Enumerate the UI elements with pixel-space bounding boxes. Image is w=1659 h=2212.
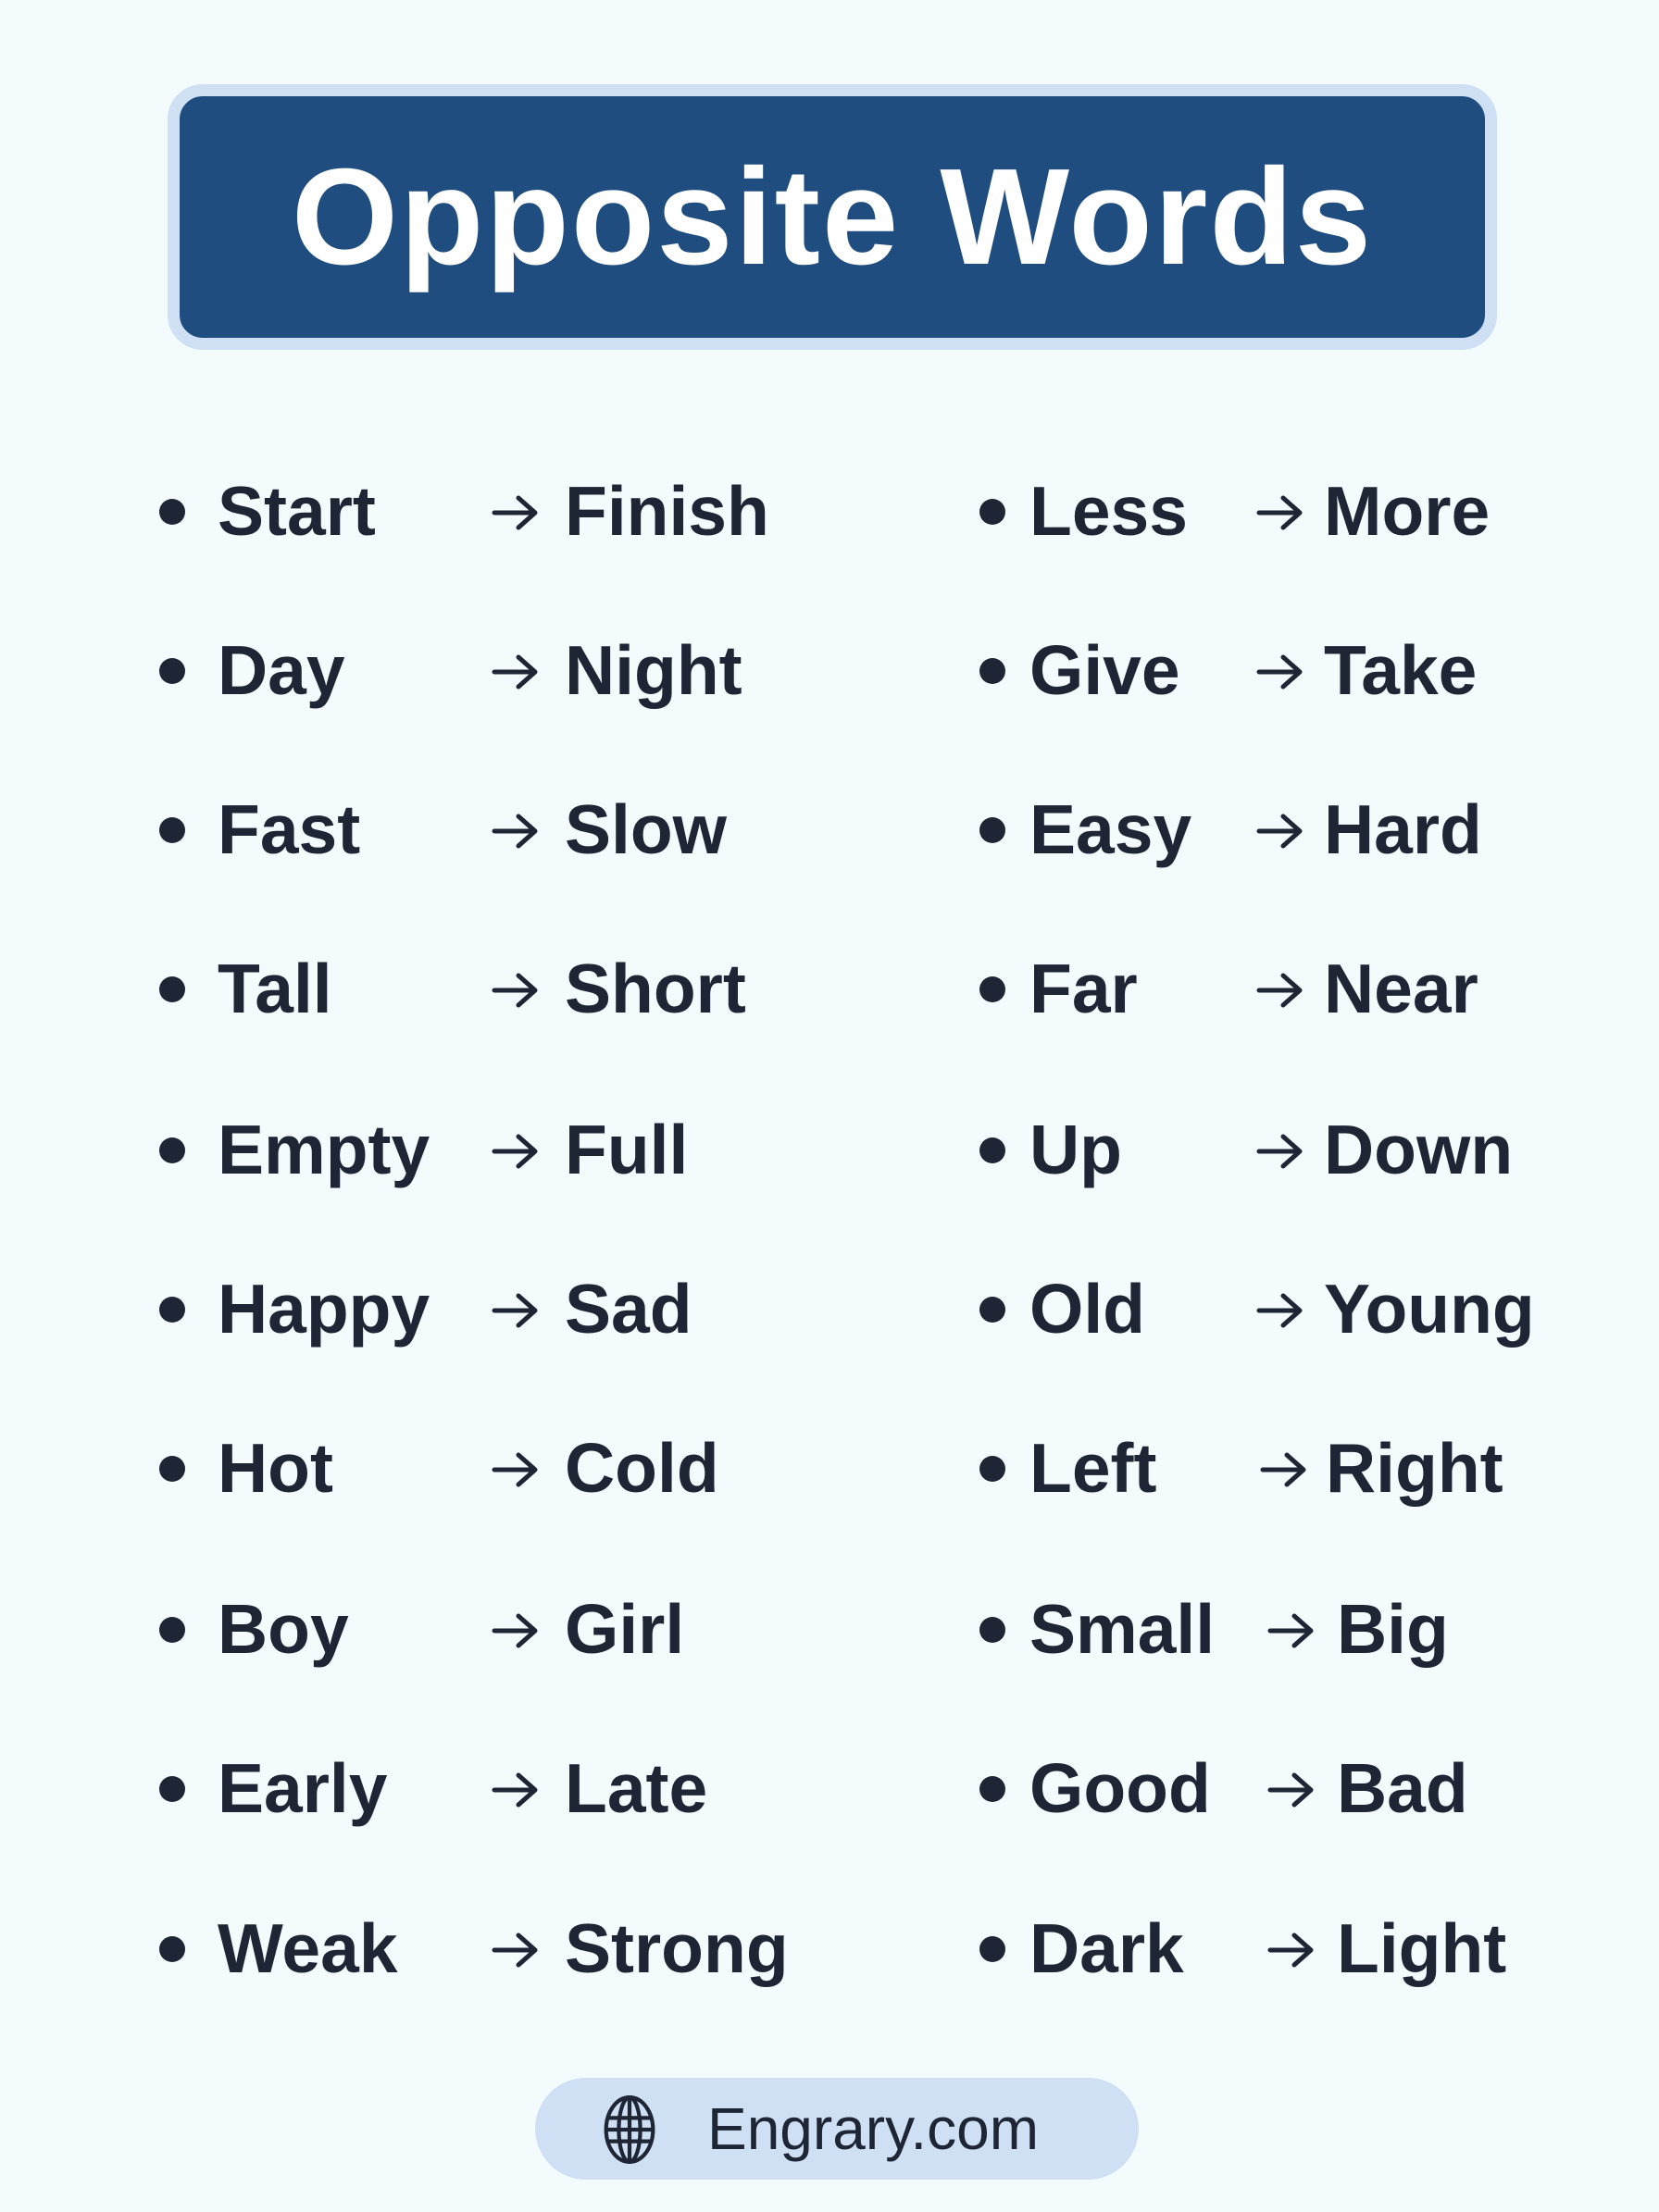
row 6: Old [1029, 1270, 1145, 1348]
row 9: Late [565, 1749, 707, 1827]
row 6: Sad [565, 1270, 692, 1348]
title: Opposite Words [292, 141, 1373, 292]
row 4: Far [1029, 950, 1138, 1027]
row 2 [159, 631, 1477, 709]
row 10: Dark [1029, 1909, 1184, 1987]
row 8: Boy [218, 1590, 349, 1668]
row 10: Light [1337, 1909, 1506, 1987]
row 10: Weak [218, 1909, 398, 1987]
row 9 [159, 1749, 1468, 1827]
row 5: Full [565, 1111, 688, 1188]
row 1: More [1324, 472, 1490, 550]
row 5: Up [1029, 1111, 1122, 1188]
row 6: Happy [218, 1270, 430, 1348]
row 8: Big [1337, 1590, 1449, 1668]
row 4: Tall [218, 950, 332, 1027]
row 7: Right [1326, 1429, 1503, 1507]
row 1 [159, 472, 1490, 550]
row 7: Hot [218, 1429, 333, 1507]
row 10: Strong [565, 1909, 789, 1987]
row 3: Easy [1029, 790, 1191, 868]
footer [535, 2078, 1139, 2180]
row 3: Slow [565, 790, 727, 868]
row 5 [159, 1111, 1513, 1188]
website text: Engrary.com [707, 2095, 1039, 2162]
row 1: Start [218, 472, 376, 550]
row 3 [159, 790, 1482, 868]
row 7 [159, 1429, 1503, 1507]
title [168, 84, 1497, 350]
row 3: Fast [218, 790, 360, 868]
row 9: Good [1029, 1749, 1211, 1827]
row 2: Night [565, 631, 742, 709]
row 6 [159, 1270, 1535, 1348]
row 4 [159, 950, 1478, 1027]
row 6: Young [1324, 1270, 1535, 1348]
row 10 [159, 1909, 1506, 1987]
row 2: Give [1029, 631, 1180, 709]
row 9: Early [218, 1749, 387, 1827]
row 5: Down [1324, 1111, 1513, 1188]
row 1: Less [1029, 472, 1188, 550]
row 7: Left [1029, 1429, 1156, 1507]
row 2: Day [218, 631, 345, 709]
row 8: Small [1029, 1590, 1215, 1668]
row 9: Bad [1337, 1749, 1468, 1827]
row 7: Cold [565, 1429, 719, 1507]
row 4: Near [1324, 950, 1478, 1027]
row 1: Finish [565, 472, 769, 550]
row 5: Empty [218, 1111, 430, 1188]
icon: globe [604, 2095, 655, 2164]
row 8 [159, 1590, 1449, 1668]
row 4: Short [565, 950, 746, 1027]
row 2: Take [1324, 631, 1477, 709]
row 3: Hard [1324, 790, 1482, 868]
row 8: Girl [565, 1590, 684, 1668]
